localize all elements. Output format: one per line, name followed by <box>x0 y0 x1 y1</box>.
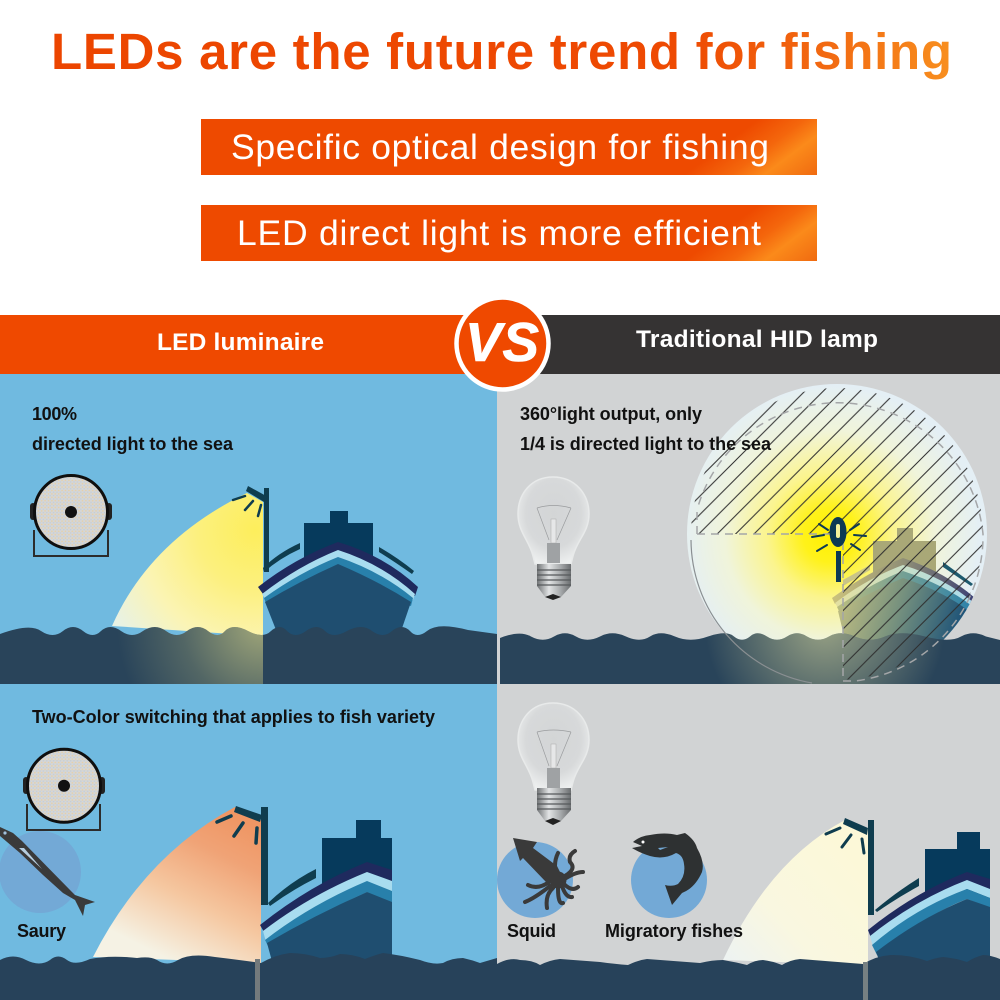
text: 360 light output: 1/4 is directed light to the sea <box>520 434 772 454</box>
ship <box>258 511 418 640</box>
label: migratory fishes: Migratory fishes <box>605 921 743 941</box>
label: saury: Saury <box>17 921 66 941</box>
pale beam <box>723 820 868 965</box>
panel: HID fish varieties <box>497 684 1000 1000</box>
saury icon <box>0 827 95 916</box>
panel: LED 100% directed light <box>0 374 497 684</box>
HID bulb <box>518 477 589 600</box>
sea <box>497 955 1000 1000</box>
text: 100% directed light: directed light to the sea <box>32 434 234 454</box>
banner: LED direct light: LED direct light is more efficient <box>237 213 761 253</box>
header: LED luminaire: LED luminaire <box>157 329 324 356</box>
mast and lamp <box>217 806 268 905</box>
dashed boundary <box>697 403 983 681</box>
grey post <box>863 962 868 1000</box>
header: Traditional HID lamp <box>500 315 1000 374</box>
VS badge <box>456 298 548 390</box>
banner: LED direct light <box>201 205 817 261</box>
label: squid: Squid <box>507 921 556 941</box>
text: 360 light output: 360°light output, only <box>520 404 702 424</box>
banner: specific optical design <box>201 119 817 175</box>
orange beam <box>93 807 261 963</box>
sea <box>500 633 1000 684</box>
panel: LED two-color switching <box>0 684 497 1000</box>
grey post <box>255 959 260 1000</box>
underwater glow <box>130 627 263 684</box>
light circle <box>687 384 987 684</box>
light beam <box>112 493 263 636</box>
header: LED luminaire <box>0 315 500 374</box>
mast and lamp <box>826 818 874 915</box>
migratory fish icon <box>631 833 707 918</box>
panel: HID 360 degree light <box>497 374 1000 684</box>
faded ship <box>832 528 975 640</box>
text: 360 light output <box>520 404 772 454</box>
text: two-color switching: Two-Color switching that applies to fish variety <box>32 707 435 727</box>
sea <box>0 626 497 684</box>
lamp icon <box>812 517 866 582</box>
hatched wasted light region <box>680 380 990 684</box>
VS badge: VS <box>465 311 539 373</box>
text: 100% directed light <box>32 404 234 454</box>
luminaire product <box>30 476 112 556</box>
sea <box>0 953 497 1000</box>
mast and lamp <box>233 486 269 572</box>
ship <box>260 820 392 965</box>
luminaire product <box>23 749 105 830</box>
banner: specific optical design: Specific optical design for fishing <box>231 127 769 167</box>
HID bulb <box>518 703 589 825</box>
ship <box>868 832 990 968</box>
arc outline <box>691 540 812 683</box>
title: LEDs are the future trend for fishing <box>51 23 952 80</box>
underwater glow <box>714 633 935 684</box>
text: 100% directed light: 100% <box>32 404 77 424</box>
squid icon <box>497 838 583 918</box>
header: Traditional HID lamp: Traditional HID lamp <box>636 326 878 353</box>
